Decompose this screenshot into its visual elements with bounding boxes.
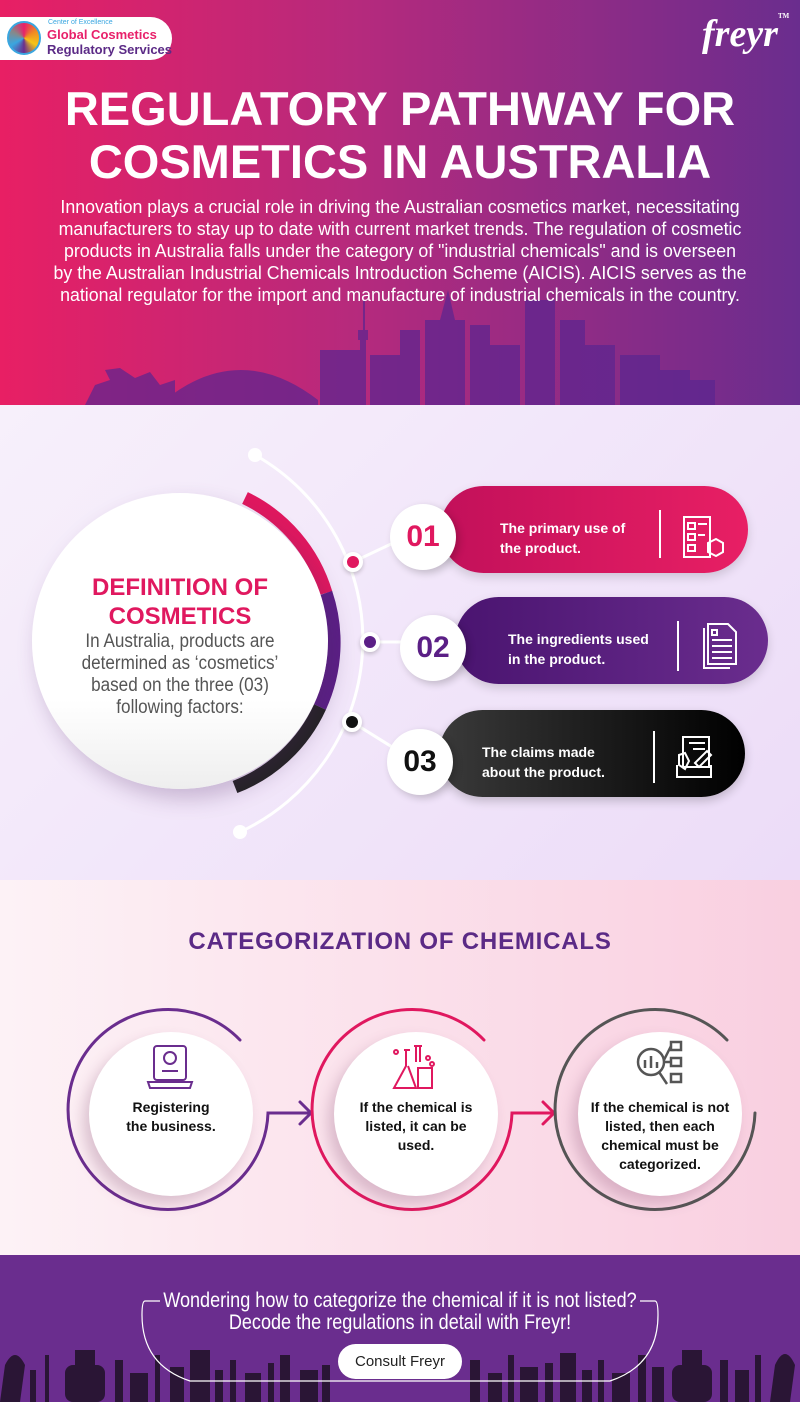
intro paragraph: products in Australia falls under the category of "industrial chemicals" and is overseen <box>64 240 736 261</box>
footer call to action <box>0 1255 800 1402</box>
logo pill: Global Cosmetics <box>47 27 157 42</box>
factor 02: 02 <box>416 631 450 664</box>
icon: registration laptop <box>146 1045 194 1089</box>
factor 03: The claims made <box>482 744 595 760</box>
intro paragraph: by the Australian Industrial Chemicals Introduction Scheme (AICIS). AICIS serves as the <box>54 262 746 283</box>
header section <box>0 0 800 405</box>
factor 03: 03 <box>403 745 437 778</box>
step 3: listed, then each <box>605 1118 715 1134</box>
factor 02 <box>400 597 772 692</box>
step 2: listed, it can be <box>365 1118 467 1134</box>
step 2: If the chemical is <box>360 1099 472 1115</box>
title: COSMETICS IN AUSTRALIA <box>89 135 711 188</box>
freyr logo: freyrTM <box>702 12 789 55</box>
skyline silhouette <box>85 290 715 405</box>
factor 01: 01 <box>406 520 440 553</box>
body text: following factors: <box>116 697 244 718</box>
intro paragraph: national regulator for the import and manufacture of industrial chemicals in the country. <box>60 284 740 305</box>
button: consult freyr: Consult Freyr <box>355 1353 445 1370</box>
cta text: Wondering how to categorize the chemical if it is not listed? <box>163 1289 637 1312</box>
factor 03 <box>386 710 750 806</box>
body text: In Australia, products are <box>85 631 275 652</box>
step 3: If the chemical is not <box>591 1099 729 1115</box>
step 2: used. <box>398 1137 434 1153</box>
body text: based on the three (03) <box>91 675 269 696</box>
title: REGULATORY PATHWAY FOR <box>65 82 735 135</box>
intro paragraph: manufacturers to stay up to date with current market trends. The regulation of cosmetic <box>59 218 741 239</box>
step 1: the business. <box>126 1118 216 1134</box>
icon: lab flasks <box>392 1045 435 1089</box>
step 1 <box>89 1032 253 1196</box>
logo pill: Regulatory Services <box>47 42 172 57</box>
intro paragraph: Innovation plays a crucial role in driving the Australian cosmetics market, necessitating <box>60 196 740 217</box>
heading: CATEGORIZATION OF CHEMICALS <box>188 928 612 955</box>
step 2 <box>334 1032 498 1196</box>
cta text: Decode the regulations in detail with Freyr! <box>229 1311 571 1334</box>
heading: DEFINITION OF <box>92 574 268 601</box>
body text: determined as ‘cosmetics’ <box>82 653 278 674</box>
logo pill <box>0 17 172 60</box>
factor 01: The primary use of <box>500 520 625 536</box>
connector dots <box>340 552 382 736</box>
cta text <box>163 1289 637 1334</box>
step 3: categorized. <box>619 1156 701 1172</box>
button: consult freyr <box>338 1344 462 1379</box>
heading: COSMETICS <box>109 603 251 630</box>
ring arcs and connector curve <box>232 448 401 839</box>
body text <box>82 631 278 718</box>
icon: checklist box <box>683 516 724 558</box>
factor 03: about the product. <box>482 764 605 780</box>
step 1: Registering <box>132 1099 210 1115</box>
step arcs and arrows <box>66 1008 756 1211</box>
icon: claim document <box>676 736 712 778</box>
title <box>65 82 735 188</box>
factor 02: in the product. <box>508 651 605 667</box>
panel: categorization of chemicals <box>0 880 800 1255</box>
cosmetics silhouette <box>0 1300 795 1402</box>
intro paragraph <box>54 196 746 305</box>
factor 01: the product. <box>500 540 581 556</box>
logo icon <box>7 21 41 55</box>
factor 01 <box>390 486 752 580</box>
icon: analysis magnifier <box>636 1040 682 1085</box>
logo pill: Center of Excellence <box>48 19 113 26</box>
icon: document <box>703 623 737 669</box>
central circle <box>32 493 328 789</box>
factor 02: The ingredients used <box>508 631 649 647</box>
heading <box>92 574 268 630</box>
step 3: chemical must be <box>601 1137 719 1153</box>
panel: definition of cosmetics <box>0 405 800 880</box>
step 3 <box>578 1032 742 1196</box>
